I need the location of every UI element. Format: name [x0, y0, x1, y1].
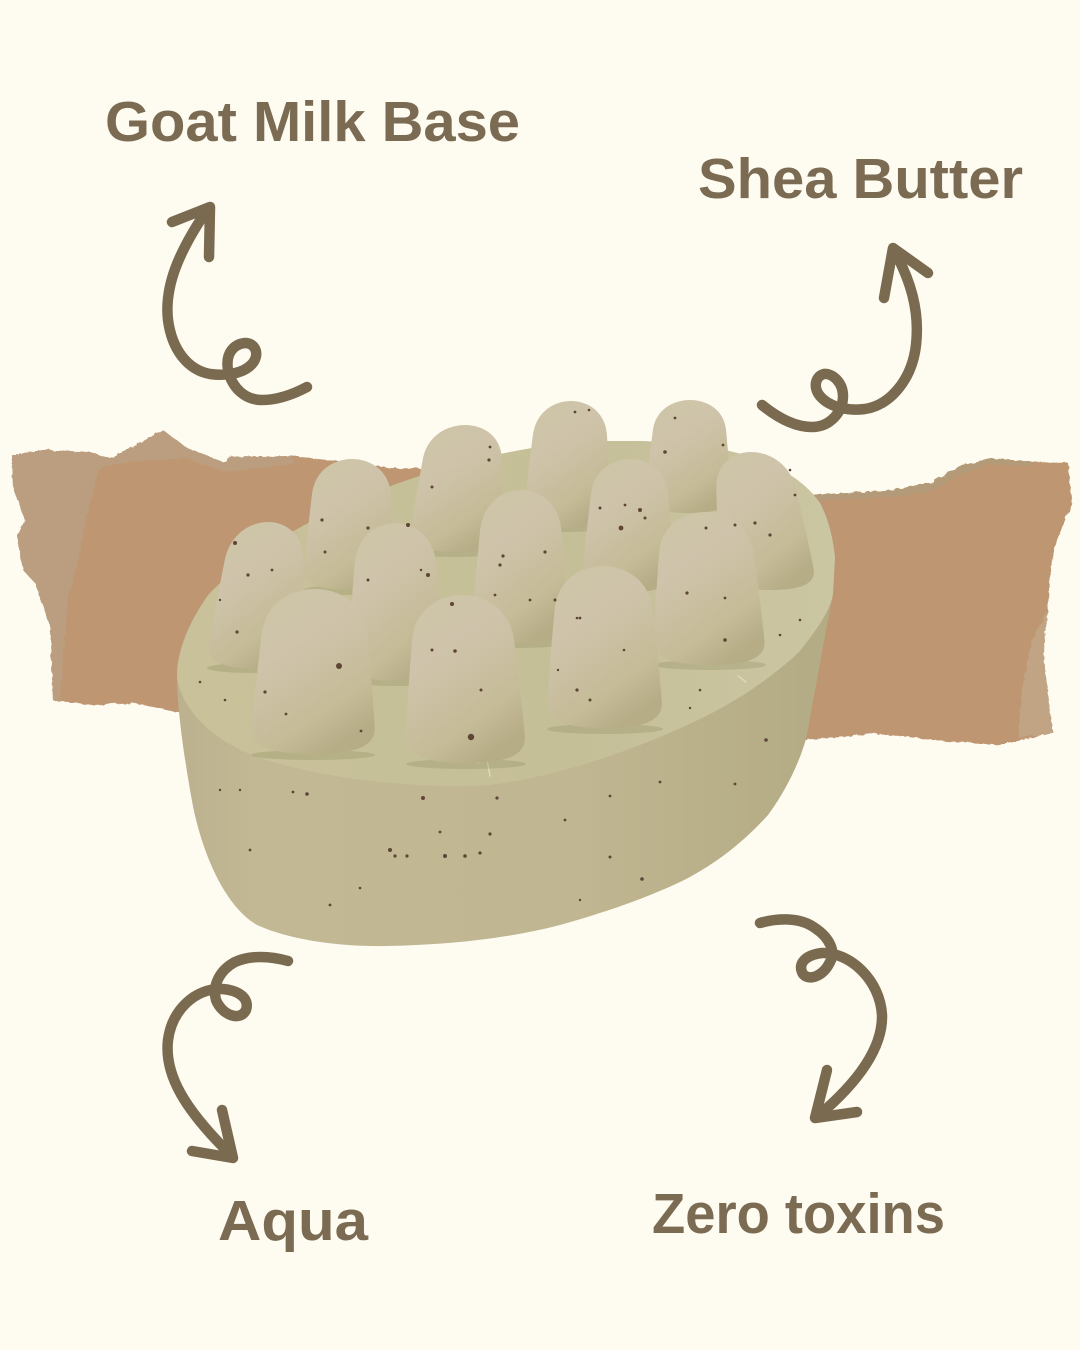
arrow: Aqua — [168, 957, 288, 1158]
heading: Zero toxins: Zero toxins — [652, 1182, 945, 1246]
heading: Aqua: Aqua — [218, 1189, 369, 1253]
heading: Shea Butter: Shea Butter — [698, 147, 1023, 211]
soap bump shadows — [207, 522, 766, 769]
soap bumps — [207, 400, 817, 763]
soap body side — [177, 441, 835, 946]
soap speckles — [199, 409, 801, 906]
arrow: Goat Milk Base — [167, 207, 307, 400]
soap rim details — [478, 676, 746, 776]
torn paper strip — [12, 430, 1072, 745]
soap bar — [177, 400, 835, 946]
arrow: Shea Butter — [762, 248, 928, 427]
soap top surface — [177, 441, 835, 786]
arrow: Zero toxins — [760, 919, 882, 1118]
heading: Goat Milk Base: Goat Milk Base — [105, 90, 520, 154]
